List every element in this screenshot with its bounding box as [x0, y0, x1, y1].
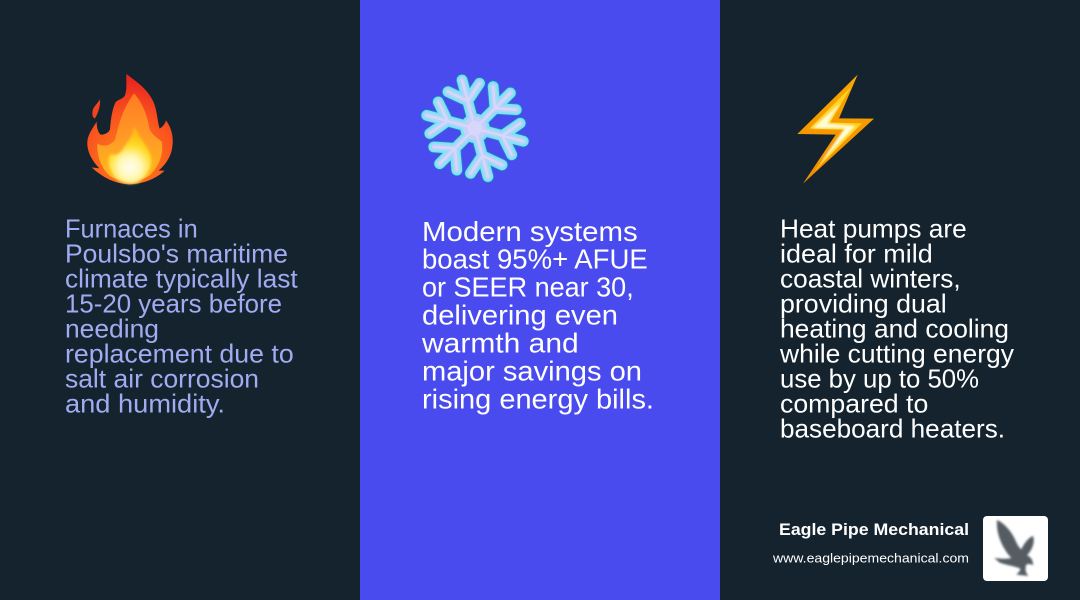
body text: modern systems: or SEER near 30,: [422, 272, 634, 302]
icon: snowflake: [420, 74, 530, 183]
body text: modern systems: Modern systems: [422, 216, 638, 247]
icon: fire: [87, 74, 173, 186]
brand name: Eagle Pipe Mechanical: [779, 520, 969, 539]
body text: heat pumps: ideal for mild: [780, 238, 933, 268]
body text: furnaces: 15-20 years before: [65, 288, 282, 318]
panel: modern systems: [360, 0, 720, 600]
body text: furnaces: Poulsbo's maritime: [65, 238, 288, 268]
body text: modern systems: major savings on: [422, 355, 642, 386]
body text: modern systems: delivering even: [422, 299, 618, 330]
body text: furnaces: [65, 214, 298, 418]
body text: modern systems: boast 95%+ AFUE: [422, 244, 648, 275]
panel: heat pumps: [720, 0, 1080, 600]
logo: eagle: [983, 516, 1048, 581]
body text: furnaces: salt air corrosion: [65, 364, 259, 394]
icon: lightning bolt: [797, 74, 874, 184]
body text: heat pumps: heating and cooling: [780, 314, 1009, 344]
panel: furnace lifespan: [0, 0, 360, 600]
body text: furnaces: climate typically last: [65, 264, 298, 294]
brand url: www.eaglepipemechanical.com: [772, 550, 969, 565]
body text: heat pumps: [779, 214, 1014, 443]
body text: modern systems: rising energy bills.: [422, 383, 654, 414]
body text: furnaces: needing: [65, 314, 159, 344]
body text: heat pumps: coastal winters,: [780, 264, 961, 294]
body text: heat pumps: compared to: [780, 388, 928, 418]
body text: furnaces: replacement due to: [65, 338, 294, 368]
body text: heat pumps: while cutting energy: [779, 338, 1014, 368]
body text: heat pumps: Heat pumps are: [780, 214, 967, 244]
body text: heat pumps: use by up to 50%: [780, 364, 979, 394]
body text: heat pumps: baseboard heaters.: [780, 413, 1005, 443]
body text: heat pumps: providing dual: [780, 288, 947, 318]
body text: modern systems: warmth and: [421, 327, 579, 358]
body text: modern systems: [421, 216, 654, 414]
body text: furnaces: and humidity.: [65, 388, 225, 418]
body text: furnaces: Furnaces in: [65, 214, 198, 244]
